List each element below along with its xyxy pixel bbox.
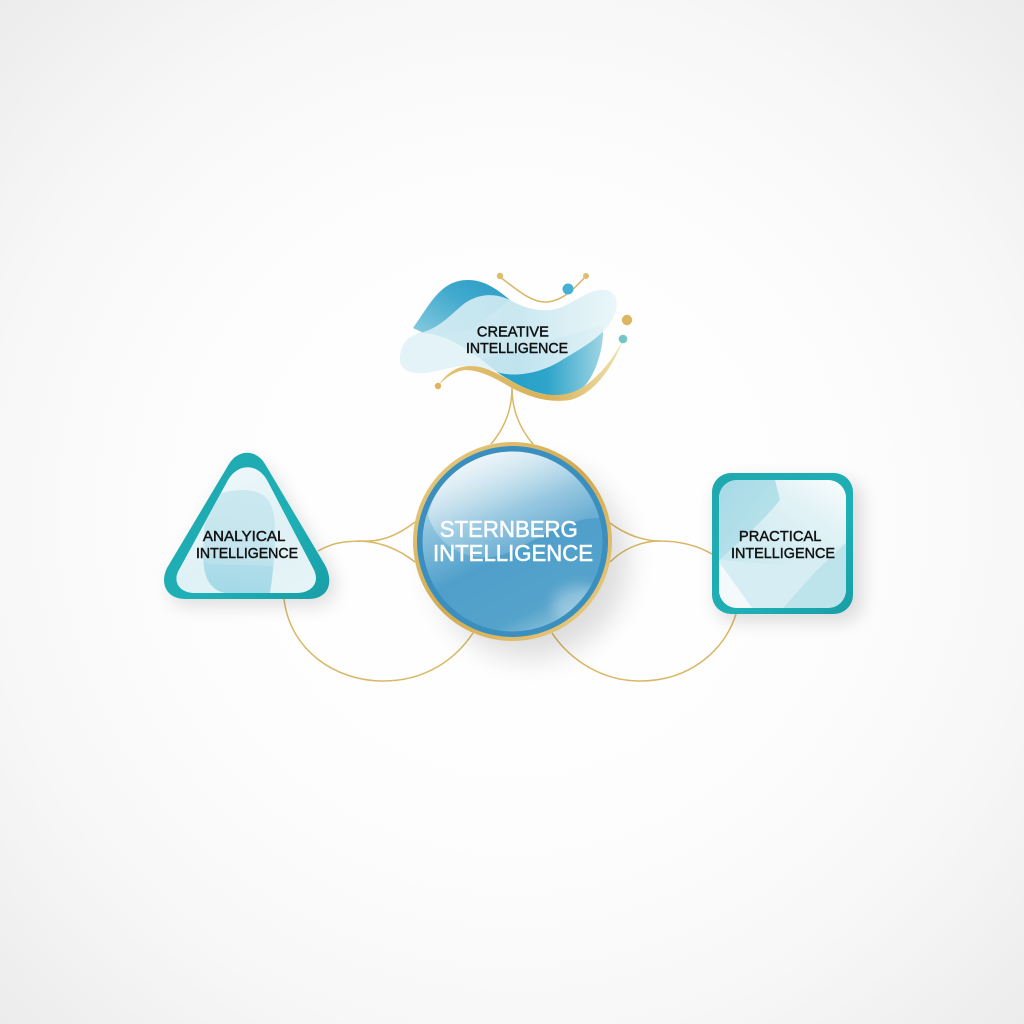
wave shape: dark blue back layer: [413, 280, 603, 395]
square frame: [712, 473, 853, 614]
practical label: PRACTICAL: [739, 528, 821, 545]
wave shape: lighter lower-left lobe: [400, 333, 497, 373]
analytical label: INTELLIGENCE: [196, 545, 298, 562]
triangle shadow: [170, 463, 336, 606]
wave shape: pale front layer: [400, 290, 617, 375]
creative label: CREATIVE: [477, 324, 549, 340]
sternberg label: STERNBERG: [440, 516, 578, 542]
creative intelligence node: [400, 273, 632, 401]
practical intelligence node: [712, 473, 862, 622]
blue rim: [417, 446, 608, 637]
gold ring: [413, 442, 612, 641]
gold swoosh: [438, 340, 623, 401]
decorative dots: [435, 273, 632, 389]
triangle glass panel: [176, 467, 316, 593]
creative label: INTELLIGENCE: [466, 340, 568, 357]
analytical label: ANALYICAL: [203, 528, 285, 545]
practical label: INTELLIGENCE: [731, 545, 835, 562]
sphere shadow: [432, 462, 628, 658]
gloss highlight: [428, 450, 606, 625]
square glass panel: [719, 480, 846, 608]
sternberg label: INTELLIGENCE: [433, 540, 593, 566]
analytical intelligence node: [164, 453, 336, 606]
triangle frame: [164, 453, 329, 599]
sphere fill: [422, 452, 602, 632]
connector lines: [284, 388, 736, 681]
thin gold curve: [500, 276, 586, 302]
square shadow: [716, 480, 862, 622]
sternberg intelligence central sphere: [413, 442, 628, 658]
